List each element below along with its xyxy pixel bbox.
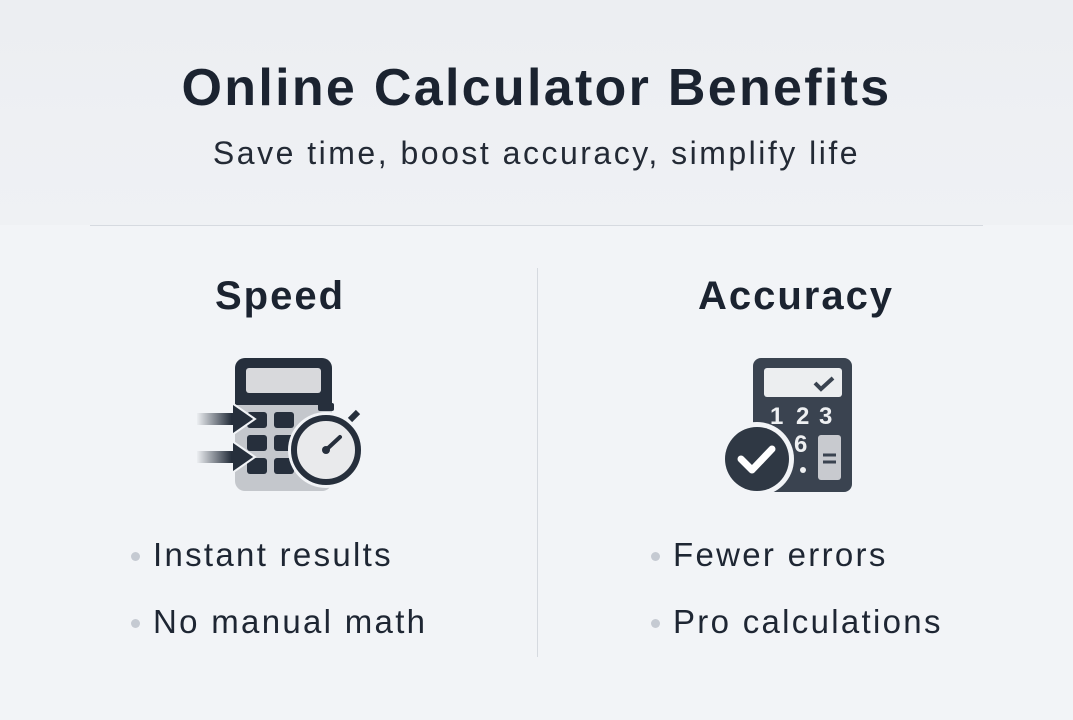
heading: accuracy: Accuracy	[698, 274, 894, 318]
icon: calculator with stopwatch	[198, 358, 361, 491]
heading: speed: Speed	[215, 274, 345, 318]
subtitle: Save time, boost accuracy, simplify life	[213, 135, 860, 171]
bullet list: accuracy	[651, 536, 943, 640]
bullet list: speed: No manual math	[153, 603, 427, 640]
icon: calculator with check: 1	[770, 403, 783, 430]
panel: speed	[131, 274, 427, 640]
panel: accuracy	[651, 274, 943, 640]
bullet list: speed	[131, 536, 427, 640]
icon: calculator with check: 2	[796, 403, 809, 430]
title: Online Calculator Benefits	[182, 59, 891, 117]
bullet list: accuracy: Pro calculations	[673, 603, 943, 640]
header band	[0, 0, 1073, 225]
bullet list: speed: Instant results	[153, 536, 393, 573]
icon: calculator with check	[725, 358, 852, 492]
icon: calculator with check: 3	[819, 403, 832, 430]
bullet list: accuracy: Fewer errors	[673, 536, 888, 573]
icon: calculator with check: 6	[794, 431, 807, 458]
